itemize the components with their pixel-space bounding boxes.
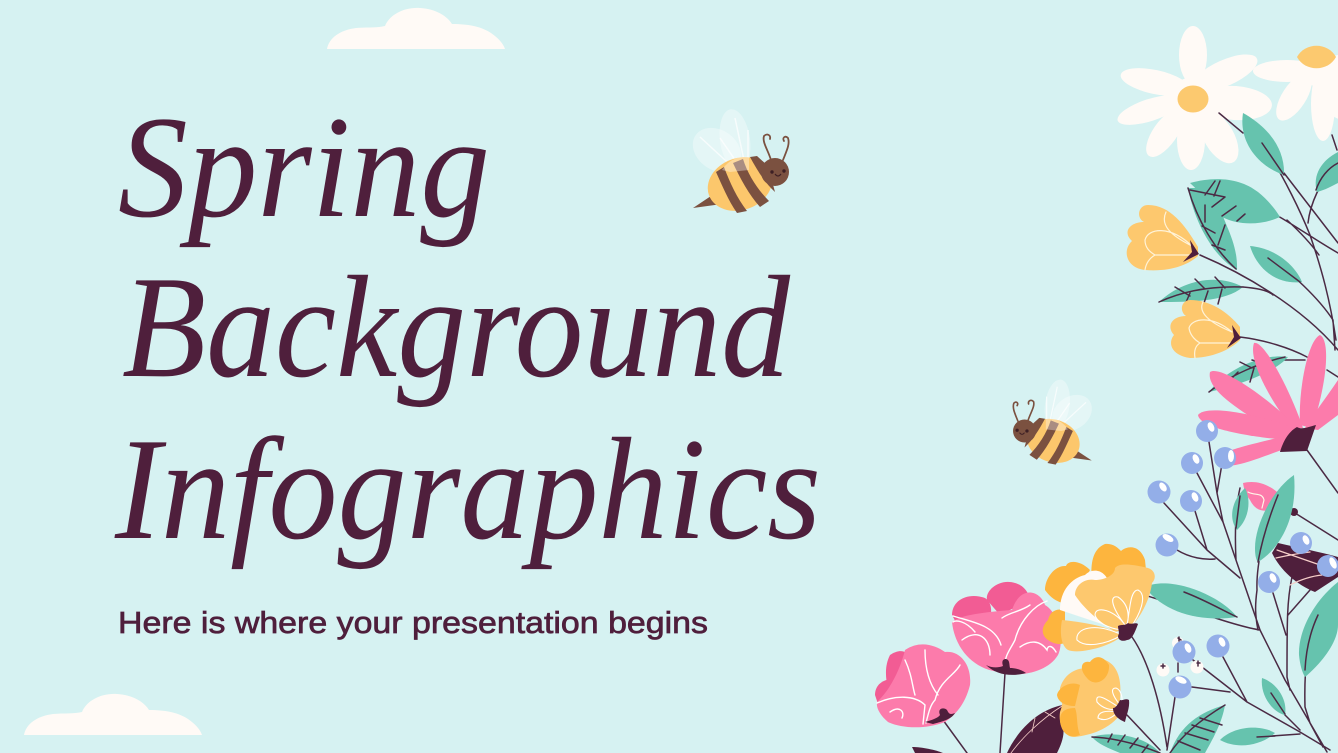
leaf: wide teal [1145, 583, 1237, 618]
stems: central branch [943, 442, 1338, 753]
bee top [684, 107, 789, 220]
subtitle: Here is where your presentation begins [118, 605, 708, 640]
daisy: right white [1253, 46, 1338, 141]
title [114, 86, 821, 570]
leaf: veined pair [1188, 179, 1280, 270]
flower: pink daisy [1198, 335, 1338, 466]
leaf: mid teal [1250, 246, 1302, 282]
leaf: dark small bottom [912, 747, 943, 753]
daisy: large white [1114, 26, 1273, 170]
leaf: right edge teal [1316, 152, 1338, 192]
bee lower [1013, 378, 1099, 470]
leaf: teal lower right [1220, 728, 1275, 745]
stems: upper branch [1200, 113, 1338, 377]
flower: pink rose large [952, 582, 1061, 675]
berries [1148, 420, 1338, 698]
flower: yellow large [1043, 544, 1155, 651]
flower: yellow small [1057, 657, 1129, 737]
tulip: yellow lower [1170, 300, 1241, 358]
leaf: dark plum [1272, 543, 1338, 592]
leaf: upper teal [1242, 113, 1284, 175]
cloud bottom [24, 694, 202, 735]
leaf: veined bottom right [1170, 705, 1225, 753]
title: Spring [118, 86, 490, 248]
leaf: behind pink flower [1209, 356, 1288, 392]
leaf: small teal lower [1262, 678, 1285, 715]
leaf: dark bottom [1007, 705, 1064, 753]
pink bud [1243, 482, 1298, 516]
leaf: small teal central [1232, 488, 1248, 530]
cloud top [327, 8, 505, 49]
title: Infographics [114, 408, 821, 570]
leaf: veined lower [1159, 277, 1243, 307]
flower: pink rose small [875, 644, 970, 727]
leaf: veined bottom left [1092, 734, 1160, 753]
title: Background [122, 246, 791, 408]
leaf: tall teal central [1255, 475, 1295, 562]
tulip: yellow upper [1127, 205, 1199, 270]
leaf: large teal right [1299, 582, 1338, 677]
